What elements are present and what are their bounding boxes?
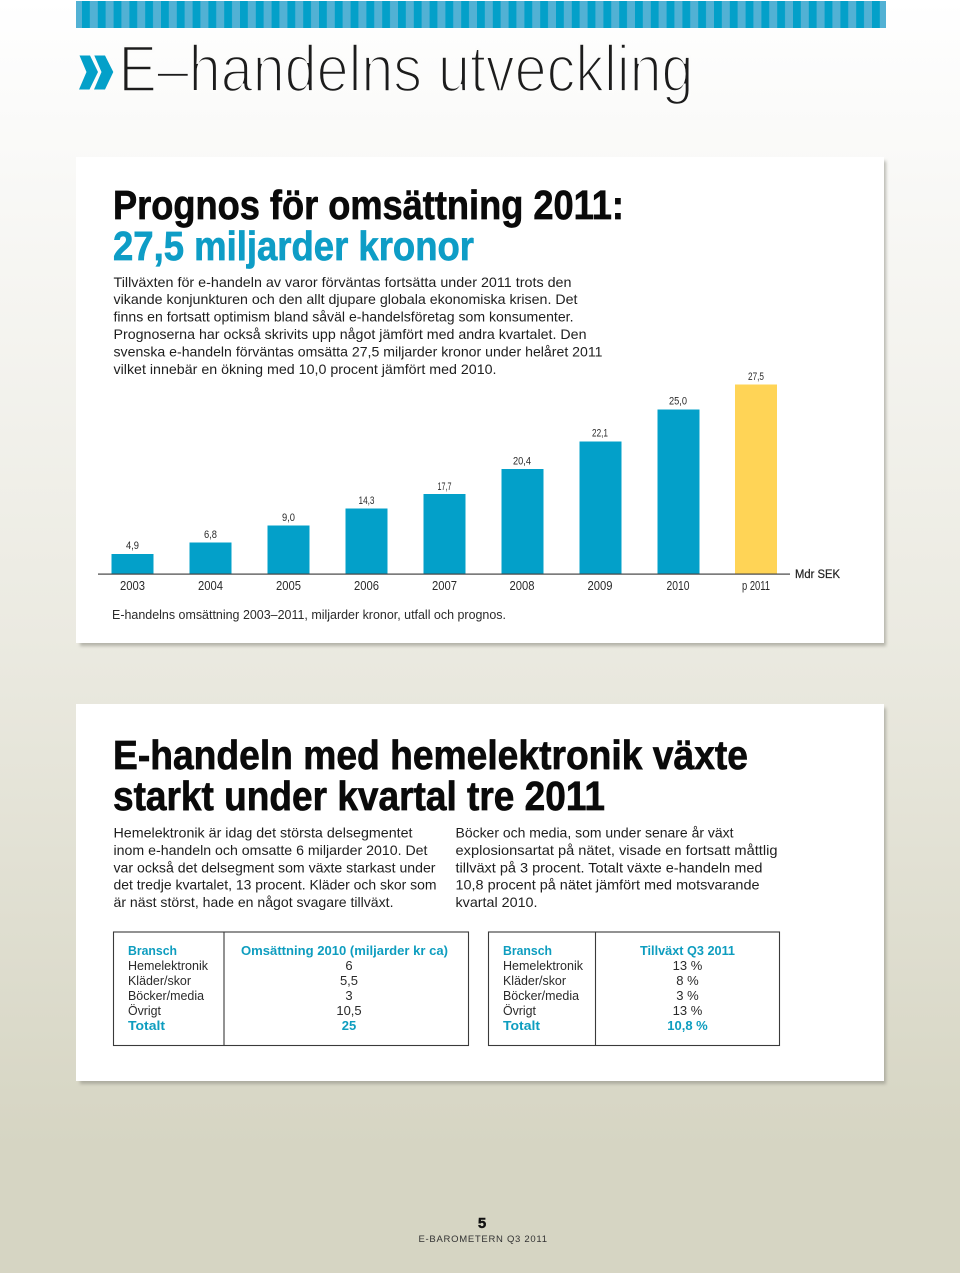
heading: forecast (113, 182, 624, 269)
text block: forecast intro: Tillväxten för e-handeln av varor förväntas fortsätta under 2011 trots den (114, 274, 572, 290)
bar 2006: 14,3 (358, 495, 374, 507)
table: growth Q3 2011: 13 % (673, 958, 703, 973)
table: growth Q3 2011: Böcker/media (503, 988, 580, 1003)
text block: left column: Hemelektronik är idag det största delsegmentet (114, 824, 413, 840)
bar chart: turnover 2003-2011 (98, 371, 840, 593)
table: growth Q3 2011: 10,8 % (667, 1018, 708, 1033)
text block: left column: var också det delsegment som växte starkast under (114, 860, 436, 876)
text block: right column: Böcker och media, som under senare år växt (456, 824, 734, 840)
panel: home electronics (76, 704, 886, 1084)
text block: left column: det tredje kvartalet, 13 procent. Kläder och skor som (114, 876, 436, 892)
table: turnover 2010: Hemelektronik (128, 958, 208, 973)
bar 2006 (346, 495, 388, 593)
heading: home electronics (113, 732, 748, 819)
text block: right column: kvartal 2010. (456, 894, 538, 910)
icon: double chevron (79, 56, 113, 90)
table: turnover 2010: 5,5 (340, 973, 358, 988)
bar 2011 forecast (735, 371, 777, 593)
bar 2003: 2003 (120, 579, 145, 593)
text block: forecast intro: vikande konjunkturen och den allt djupare globala ekonomiska krisen. Det (114, 291, 578, 307)
bar 2007: 17,7 (438, 481, 452, 493)
table: turnover 2010: 3 (345, 988, 353, 1003)
table: growth Q3 2011: Övrigt (503, 1003, 536, 1018)
chart caption: E-handelns omsättning 2003–2011, miljarder kronor, utfall och prognos. (112, 607, 506, 622)
table: turnover 2010: Omsättning 2010 (miljarder kr ca) (241, 943, 448, 958)
table: growth Q3 2011: Kläder/skor (503, 973, 567, 988)
bar 2004 (190, 529, 232, 593)
table: growth Q3 2011: 8 % (676, 973, 699, 988)
panel: forecast 2011 (76, 157, 886, 646)
text block: right column: explosionsartat på nätet, visade en fortsatt måttlig (456, 842, 778, 858)
text block: forecast intro: Prognoserna har också skrivits upp något jämfört med andra kvartalet. Den (114, 326, 586, 342)
footer publication name: E-BAROMETERN Q3 2011 (418, 1234, 547, 1245)
bar 2008 (502, 456, 544, 593)
table: growth Q3 2011: 3 % (676, 988, 699, 1003)
bar 2009: 2009 (588, 579, 613, 593)
bar 2010 (658, 396, 700, 593)
bar 2010: 2010 (666, 579, 690, 593)
table: turnover 2010: Bransch (128, 943, 177, 958)
bar 2009: 22,1 (592, 428, 608, 440)
heading: home electronics: E-handeln med hemelektronik växte (113, 732, 748, 778)
text block: right column: 10,8 procent på nätet jämfört med motsvarande (456, 876, 760, 892)
text block: forecast intro (114, 274, 603, 377)
table: turnover 2010: 6 (345, 958, 353, 973)
text block: right column (456, 824, 778, 910)
table: growth Q3 2011: Tillväxt Q3 2011 (640, 943, 735, 958)
bar 2004: 6,8 (204, 529, 217, 541)
heading: forecast: Prognos för omsättning 2011: (113, 182, 624, 228)
table: growth Q3 2011: Totalt (503, 1018, 541, 1033)
text block: left column (114, 824, 436, 910)
table: growth Q3 2011: Hemelektronik (503, 958, 583, 973)
table: growth Q3 2011 (488, 932, 780, 1046)
bar 2008: 20,4 (513, 456, 531, 468)
text block: forecast intro: vilket innebär en ökning med 10,0 procent jämfört med 2010. (114, 361, 496, 377)
bar 2004: 2004 (198, 579, 223, 593)
table: turnover 2010: 25 (342, 1018, 356, 1033)
heading: forecast: 27,5 miljarder kronor (113, 223, 474, 269)
page title: E–handelns utveckling (118, 32, 694, 106)
table: turnover 2010: Kläder/skor (128, 973, 192, 988)
text block: forecast intro: finns en fortsatt optimism bland såväl e-handelsföretag som konsumenter. (114, 308, 574, 324)
striped header band (76, 1, 886, 28)
bar 2003 (112, 540, 154, 593)
heading: home electronics: starkt under kvartal tre 2011 (113, 773, 605, 819)
text block: left column: inom e-handeln och omsatte 6 miljarder 2010. Det (114, 842, 428, 858)
bar 2007: 2007 (432, 579, 457, 593)
bar 2011 forecast: p 2011 (742, 579, 770, 593)
text block: left column: är näst störst, hade en något svagare tillväxt. (114, 894, 394, 910)
text block: right column: tillväxt på 3 procent. Totalt växte e-handeln med (456, 860, 762, 876)
bar 2006: 2006 (354, 579, 379, 593)
table: turnover 2010 (114, 932, 468, 1046)
bar 2009 (580, 428, 622, 593)
bar 2010: 25,0 (669, 396, 687, 408)
table: growth Q3 2011: 13 % (673, 1003, 703, 1018)
bar 2005: 2005 (276, 579, 301, 593)
unit label: Mdr SEK (795, 569, 840, 581)
table: growth Q3 2011: Bransch (503, 943, 552, 958)
bar 2011 forecast: 27,5 (748, 371, 764, 383)
bar 2008: 2008 (510, 579, 535, 593)
page number: 5 (478, 1215, 486, 1232)
table: turnover 2010: Totalt (128, 1018, 166, 1033)
table: turnover 2010: Övrigt (128, 1003, 161, 1018)
table: turnover 2010: Böcker/media (128, 988, 205, 1003)
table: turnover 2010: 10,5 (336, 1003, 362, 1018)
bar 2003: 4,9 (126, 540, 139, 552)
bar 2005: 9,0 (282, 512, 295, 524)
bar 2005 (268, 512, 310, 593)
text block: forecast intro: svenska e-handeln förväntas omsätta 27,5 miljarder kronor under helåret 2011 (114, 344, 603, 360)
bar 2007 (424, 481, 466, 593)
